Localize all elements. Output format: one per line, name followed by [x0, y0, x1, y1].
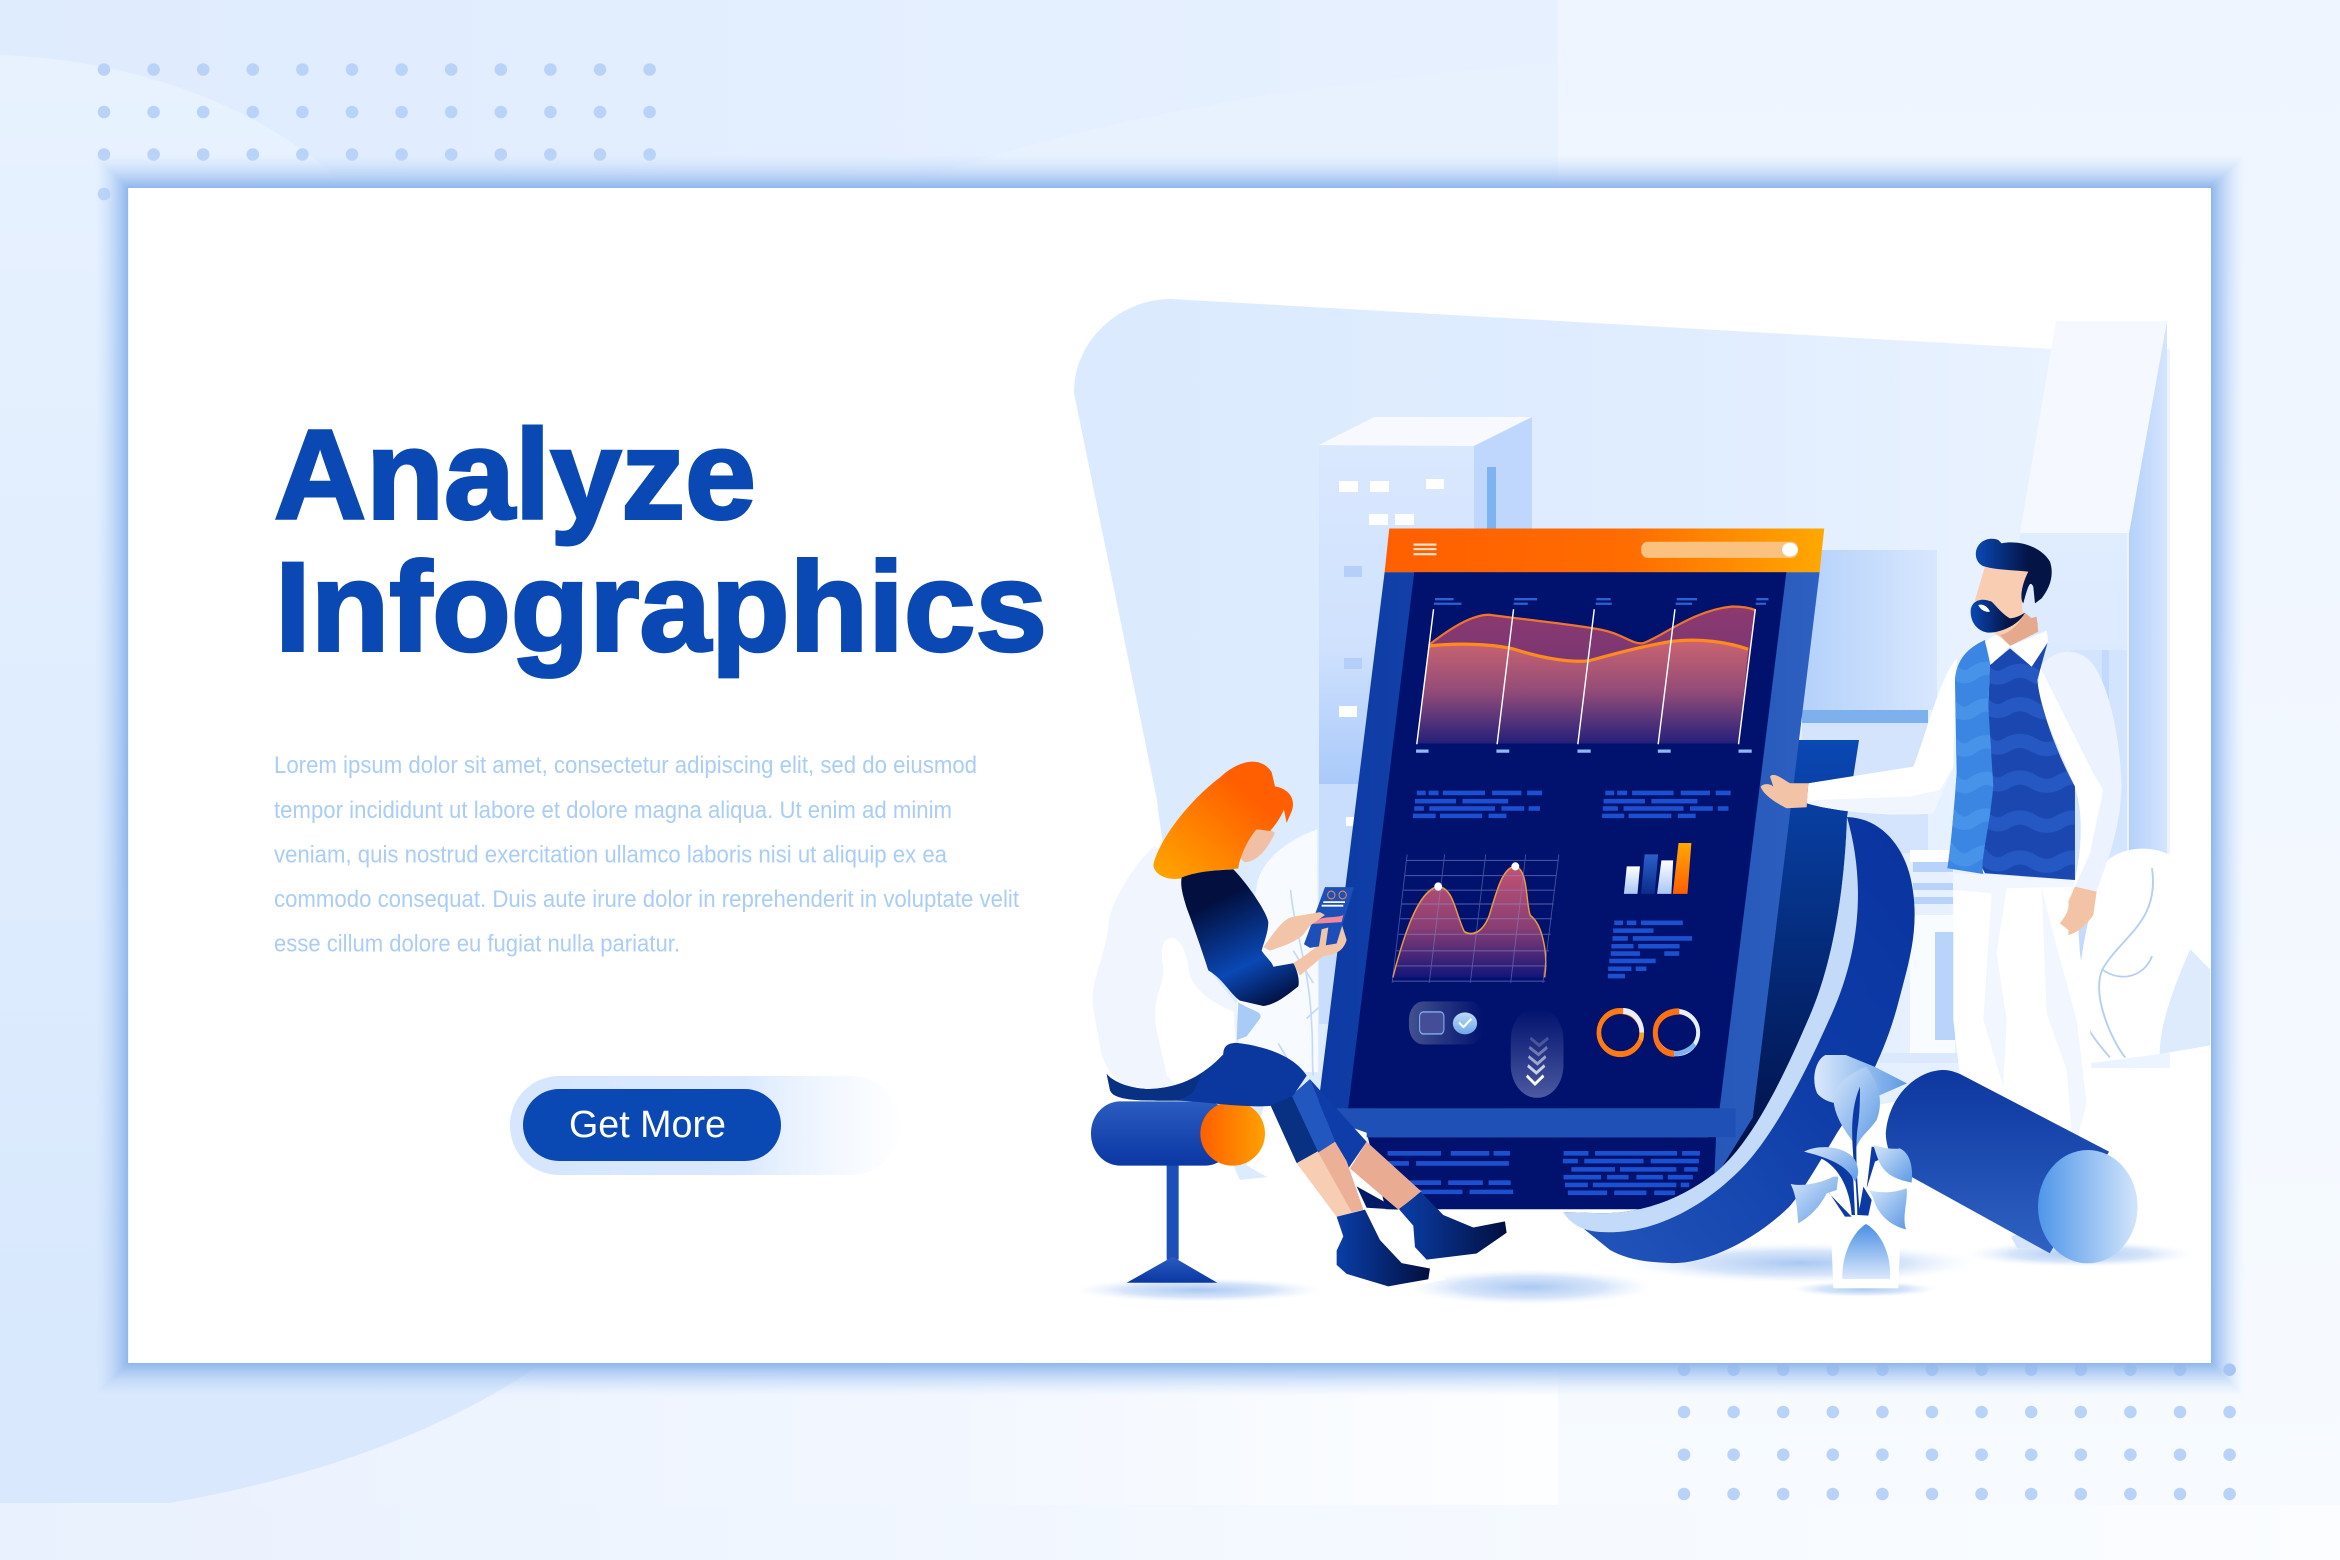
donut chart 1	[1599, 1011, 1642, 1054]
left building	[1319, 417, 1532, 1024]
background panels and shelves	[1802, 550, 1960, 1063]
head	[1971, 539, 2052, 645]
man	[1761, 539, 2122, 1200]
woman with stool	[1091, 762, 1507, 1297]
area chart	[1416, 599, 1769, 751]
title: Analyze	[274, 404, 756, 546]
dot grid: top left	[104, 70, 650, 194]
dark panel behind the screen	[1700, 740, 1859, 1173]
dot grid: bottom right	[1684, 1370, 2231, 1494]
ground shadows	[1074, 1241, 2195, 1305]
toggle control	[1409, 1001, 1484, 1044]
top	[1181, 869, 1299, 1006]
legs	[1297, 1079, 1507, 1297]
body paragraph: commodo consequat. Duis aute irure dolor in reprehenderit in voluptate velit	[274, 886, 1019, 913]
body paragraph: veniam, quis nostrud exercitation ullamco laboris nisi ut aliquip ex ea	[274, 842, 948, 868]
bush behind the woman	[1093, 829, 1367, 1211]
hands	[1761, 775, 2097, 935]
skirt and shorts	[1107, 1043, 1335, 1163]
title: Infographics	[275, 536, 1047, 678]
title	[274, 404, 1047, 678]
ribbon arc	[1563, 817, 1915, 1263]
main white card	[128, 188, 2211, 1363]
screen panel	[1348, 572, 1786, 1108]
card glow	[95, 155, 2244, 1396]
neck and collar	[1985, 617, 2048, 667]
screen frame	[1318, 572, 1820, 1179]
illustration backdrop blob	[1074, 299, 2170, 1180]
peak chart	[1392, 854, 1559, 983]
right building	[2020, 320, 2167, 1000]
phone and arms	[1263, 887, 1354, 976]
button: Get More: Get More	[569, 1104, 726, 1146]
pot	[1832, 1215, 1900, 1288]
body paragraph: Lorem ipsum dolor sit amet, consectetur adipiscing elit, sed do eiusmod	[274, 752, 977, 779]
bar chart	[1624, 843, 1691, 894]
leaves	[1791, 1067, 1912, 1229]
text bars: middle block	[1608, 923, 1692, 976]
shirt	[1807, 652, 2122, 892]
bush behind the man	[2078, 849, 2210, 1064]
potted plant	[1791, 1067, 1912, 1288]
cylinder	[1814, 1055, 2138, 1263]
donut chart 2	[1655, 1011, 1698, 1054]
header bar	[1385, 528, 1824, 572]
tablet screen	[1318, 528, 1824, 1209]
text bars: upper blocks	[1413, 793, 1731, 816]
stool	[1091, 1101, 1265, 1283]
body paragraph: tempor incididunt ut labore et dolore magna aliqua. Ut enim ad minim	[274, 797, 952, 824]
hair and neck	[1153, 762, 1293, 879]
ribbon light band	[1563, 817, 1858, 1232]
trousers	[1953, 873, 2093, 1200]
button: Get More	[510, 1076, 900, 1175]
lower screen panel with text bars	[1368, 1137, 1716, 1209]
body paragraph	[274, 752, 1019, 958]
vest	[1947, 640, 2087, 880]
body paragraph: esse cillum dolore eu fugiat nulla pariatur.	[274, 930, 680, 958]
scroll pill with chevrons	[1511, 1007, 1564, 1098]
